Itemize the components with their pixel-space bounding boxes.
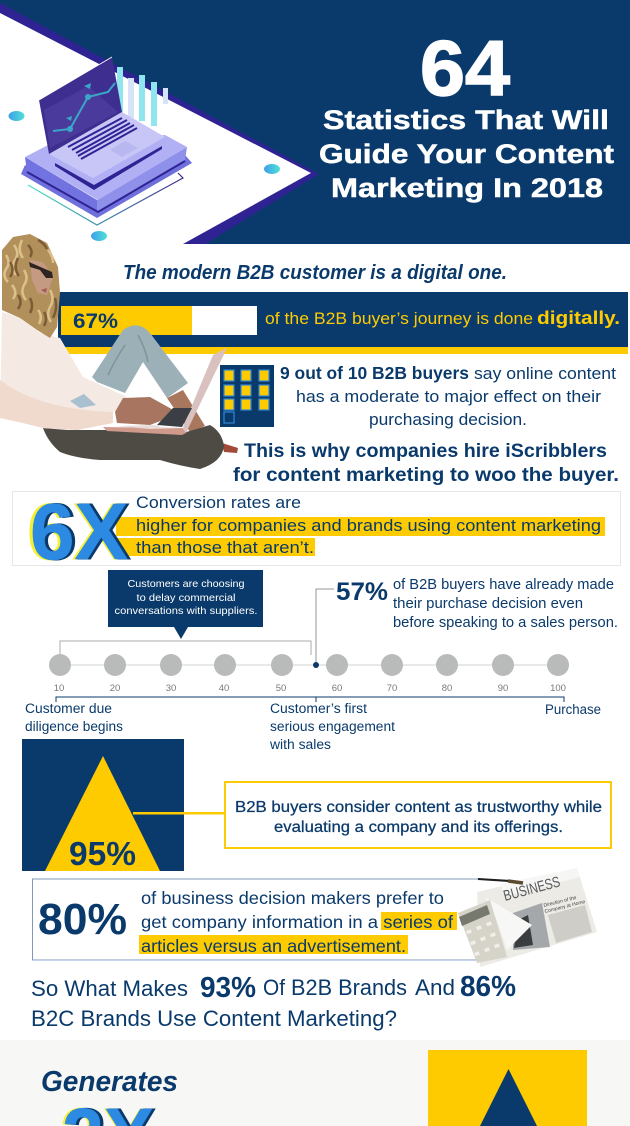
timeline chart: 100 [550, 683, 566, 694]
yellow stat block [428, 1050, 587, 1126]
heading: what makes brands use content marketing [31, 971, 516, 1031]
icon: newspaper and calculator: BUSINESS [502, 873, 562, 905]
timeline chart [25, 589, 601, 752]
timeline chart: 30 [166, 683, 176, 694]
text: get company information in a series of [141, 912, 453, 932]
header banner [0, 0, 630, 244]
curls [4, 240, 56, 326]
timeline chart: 90 [498, 683, 508, 694]
timeline chart: 60 [332, 683, 342, 694]
text: why companies hire iScribblers: This is why companies hire iScribblers [244, 440, 607, 462]
timeline chart: 10 [54, 683, 64, 694]
text: 9 out of 10: say online content [474, 364, 616, 383]
heading: what makes brands use content marketing: And [415, 975, 455, 1000]
6X figure: 6X [30, 487, 128, 576]
progress bar: 67% [73, 310, 118, 333]
text: 9 out of 10 [280, 363, 616, 429]
text: 9 out of 10: 9 out of 10 B2B buyers [280, 363, 469, 383]
title: Marketing In 2018 [331, 173, 603, 203]
illustration: woman with laptop [0, 234, 238, 469]
icon: laptop illustration [21, 57, 192, 225]
hair [2, 234, 60, 338]
panel: generates 2X [0, 1040, 630, 1126]
caption [265, 308, 620, 328]
trousers [43, 425, 224, 469]
text: 9 out of 10: purchasing decision. [369, 410, 527, 429]
face [30, 260, 53, 295]
panel: generates 2X: Generates [41, 1066, 178, 1098]
6X figure: 6X [33, 487, 131, 576]
callout: trustworthy content: evaluating a company and its offerings. [274, 819, 563, 836]
text: 9 out of 10: has a moderate to major effect on their [296, 387, 601, 406]
timeline chart: 40 [219, 683, 229, 694]
text: than those that aren’t. [136, 538, 314, 557]
caption: digitally. [537, 308, 620, 328]
callout: trustworthy content [225, 782, 611, 848]
stat: 57 percent [336, 577, 618, 631]
timeline labels: Customer due [25, 701, 112, 716]
heading: what makes brands use content marketing: So What Makes [31, 976, 188, 1001]
timeline chart: 70 [387, 683, 397, 694]
title [319, 24, 614, 203]
timeline labels: Customer’s first [270, 701, 367, 716]
data bars [117, 67, 168, 126]
panel: 95 percent: 95% [69, 835, 136, 872]
caption: of the B2B buyer’s journey is done [265, 309, 533, 328]
timeline labels: diligence begins [25, 719, 123, 734]
callout: trustworthy content: B2B buyers consider content as trustworthy while [235, 799, 602, 816]
panel: 6X conversion rates [12, 487, 620, 576]
text [141, 888, 453, 956]
photo [513, 903, 550, 950]
icon: newspaper and calculator: Company at Home [544, 899, 586, 915]
stat: 57 percent: their purchase decision even [393, 596, 583, 612]
text [136, 493, 601, 557]
icon: building [220, 365, 274, 427]
timeline labels: Purchase [545, 702, 601, 717]
stat: 57 percent: 57% [336, 578, 388, 606]
jeans leg [92, 325, 188, 398]
text: why companies hire iScribblers [233, 440, 619, 486]
timeline chart: 20 [110, 683, 120, 694]
timeline chart: 80 [442, 683, 452, 694]
text columns [548, 905, 592, 943]
callout: delay conversations [108, 570, 263, 639]
timeline labels [25, 701, 601, 752]
icon: decorative dots [8, 111, 280, 241]
subheading: The modern B2B customer is a digital one. [123, 262, 507, 284]
timeline labels: serious engagement [270, 719, 395, 734]
heading: what makes brands use content marketing: 86% [460, 971, 516, 1003]
hands [115, 397, 177, 425]
callout: delay conversations: conversations with suppliers. [114, 605, 258, 617]
peel [485, 897, 532, 950]
highlight [116, 517, 605, 556]
shirt [0, 312, 127, 430]
heading: what makes brands use content marketing: 93% [200, 972, 256, 1004]
heading: what makes brands use content marketing: Of [263, 975, 286, 1000]
timeline chart: 50 [276, 683, 286, 694]
text: of business decision makers prefer to [141, 888, 444, 908]
icon: newspaper and calculator [458, 868, 597, 967]
icon: newspaper and calculator: Direction of the [543, 895, 577, 909]
progress bar [61, 306, 257, 335]
title: 64 [420, 24, 510, 112]
laptop [103, 348, 227, 435]
stat: 57 percent: of B2B buyers have already made [393, 577, 614, 593]
title: Guide Your Content [319, 139, 614, 169]
panel: 80 percent: 80% [38, 895, 127, 944]
calculator [458, 900, 507, 963]
highlight [139, 912, 457, 954]
text: why companies hire iScribblers: for content marketing to woo the buyer. [233, 464, 619, 486]
stat: 57 percent: before speaking to a sales person. [393, 615, 618, 631]
6X figure: 6X [27, 487, 127, 576]
heading: what makes brands use content marketing: B2C Brands Use Content Marketing? [31, 1006, 397, 1031]
title: Statistics That Will [323, 105, 609, 135]
panel: 80 percent [32, 868, 597, 967]
timeline labels: with sales [269, 737, 331, 752]
shin and foot [167, 390, 205, 432]
text: articles versus an advertisement. [141, 936, 406, 956]
callout: delay conversations: Customers are choosing [128, 578, 245, 590]
panel: 95 percent [22, 739, 225, 872]
heading: what makes brands use content marketing: B2B Brands [291, 975, 407, 1000]
panel: 67 percent digital [58, 292, 628, 354]
callout: delay conversations: to delay commercial [136, 592, 236, 604]
text: higher for companies and brands using content marketing [136, 516, 601, 535]
text: Conversion rates are [136, 493, 301, 512]
